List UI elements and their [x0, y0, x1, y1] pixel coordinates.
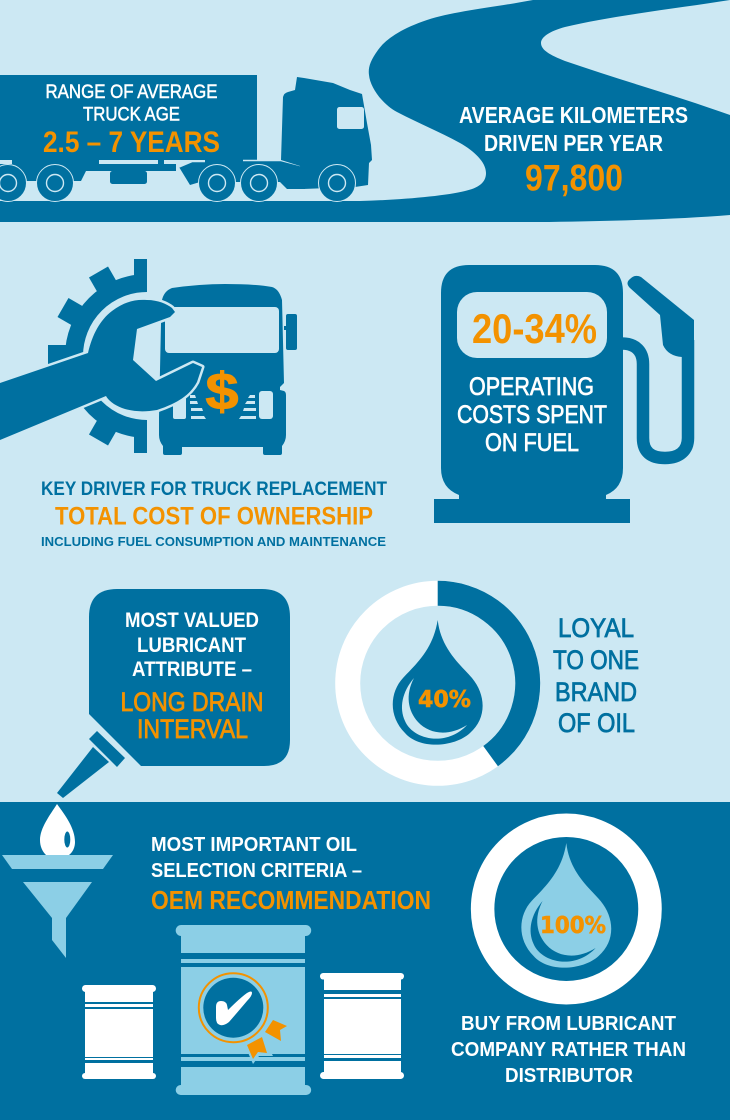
text: truck age: RANGE OF AVERAGE — [46, 82, 218, 103]
pump hose — [622, 340, 688, 458]
drop hole — [64, 832, 70, 848]
white drop — [40, 804, 75, 855]
bottle body — [89, 589, 290, 766]
bottle collar — [89, 731, 125, 767]
icon: centre barrel with badge — [176, 925, 311, 1095]
winding road — [0, 0, 730, 222]
half gear — [48, 259, 147, 453]
truck front — [159, 284, 286, 455]
callout text: LONG DRAIN — [120, 687, 264, 717]
text: buy from lubricant company: DISTRIBUTOR — [505, 1065, 634, 1087]
text: loyal to one brand of oil: TO ONE — [553, 645, 639, 675]
callout text: ATTRIBUTE – — [132, 658, 252, 681]
trailer box — [0, 75, 257, 160]
icon: funnel with oil drop — [2, 804, 113, 958]
text: loyal to one brand of oil: OF OIL — [558, 708, 635, 738]
text: loyal to one brand of oil: LOYAL — [558, 613, 634, 643]
badge ring — [199, 973, 268, 1042]
text: oil selection criteria: SELECTION CRITERIA – — [151, 860, 362, 882]
tractor frame — [179, 160, 305, 189]
text: average kilometers — [459, 102, 688, 198]
donut percentage: 40% — [418, 687, 471, 713]
text: buy from lubricant company: BUY FROM LUBRICANT — [461, 1013, 676, 1035]
text: truck replacement driver: INCLUDING FUEL CONSUMPTION AND MAINTENANCE — [41, 534, 386, 549]
panel: dark blue bottom band — [0, 802, 730, 1120]
text: oil selection criteria: OEM RECOMMENDATION — [151, 885, 431, 915]
text: loyal to one brand of oil: BRAND — [555, 677, 637, 707]
pump caption: OPERATING — [469, 373, 594, 401]
icon: dollar sign: $ — [206, 363, 239, 421]
chart: 40 percent donut — [348, 593, 528, 773]
text: oil selection criteria: MOST IMPORTANT OIL — [151, 834, 357, 856]
wrench — [0, 300, 202, 440]
drop shadow swoosh — [531, 901, 596, 962]
callout text: LUBRICANT — [137, 634, 246, 657]
badge ribbons — [246, 1020, 287, 1064]
panel: lubricant bottle callout — [57, 589, 290, 798]
text: loyal to one brand of oil — [553, 613, 639, 738]
callout text — [120, 609, 264, 744]
truck illustration — [0, 75, 372, 202]
pump caption — [457, 373, 607, 457]
barrel shape — [176, 925, 311, 1095]
icon: light oil drop — [521, 843, 611, 968]
text: average kilometers: AVERAGE KILOMETERS — [459, 102, 688, 128]
callout text: MOST VALUED — [125, 609, 259, 632]
drop highlight — [402, 678, 467, 739]
icon: oil drop — [393, 620, 483, 745]
text: truck replacement driver — [41, 479, 387, 549]
truck mirror — [284, 314, 297, 350]
funnel cone — [23, 882, 92, 958]
donut segment 40% — [438, 593, 528, 756]
trailer side strips — [0, 160, 205, 164]
pump nozzle — [628, 276, 694, 357]
text: buy from lubricant company — [451, 1013, 686, 1087]
text: truck age: TRUCK AGE — [83, 104, 180, 126]
icon: right white barrel — [320, 973, 404, 1079]
funnel rim — [2, 855, 113, 869]
pump caption: ON FUEL — [485, 429, 579, 457]
icon: left white barrel — [82, 985, 156, 1079]
icon: check mark — [216, 992, 252, 1025]
pump body — [434, 265, 630, 523]
pump display — [457, 292, 607, 358]
icon: fuel pump — [434, 265, 694, 523]
fuel tank — [110, 171, 147, 184]
ring percentage: 100% — [540, 913, 606, 939]
truck cab — [281, 77, 372, 189]
display percentage: 20-34% — [472, 305, 597, 352]
text: average kilometers: 97,800 — [525, 158, 623, 198]
cab window — [337, 107, 364, 129]
text: truck age: 2.5 – 7 YEARS — [43, 126, 220, 159]
text: oil selection criteria — [151, 834, 431, 915]
wheels — [0, 164, 356, 202]
badge centre — [203, 978, 263, 1038]
truck headlights and grille — [173, 391, 273, 419]
truck windshield — [165, 307, 279, 353]
text: truck replacement driver: KEY DRIVER FOR TRUCK REPLACEMENT — [41, 479, 387, 500]
chart: 100 percent ring — [483, 825, 650, 993]
text: buy from lubricant company: COMPANY RATHER THAN — [451, 1039, 686, 1061]
trailer chassis — [0, 160, 205, 181]
bottle spout — [57, 747, 109, 798]
text: truck age — [43, 82, 220, 159]
pump caption: COSTS SPENT — [457, 401, 607, 429]
callout text: INTERVAL — [137, 714, 248, 744]
icon: gear with wrench and truck — [0, 259, 297, 455]
text: truck replacement driver: TOTAL COST OF OWNERSHIP — [55, 502, 373, 530]
text: average kilometers: DRIVEN PER YEAR — [484, 130, 663, 156]
